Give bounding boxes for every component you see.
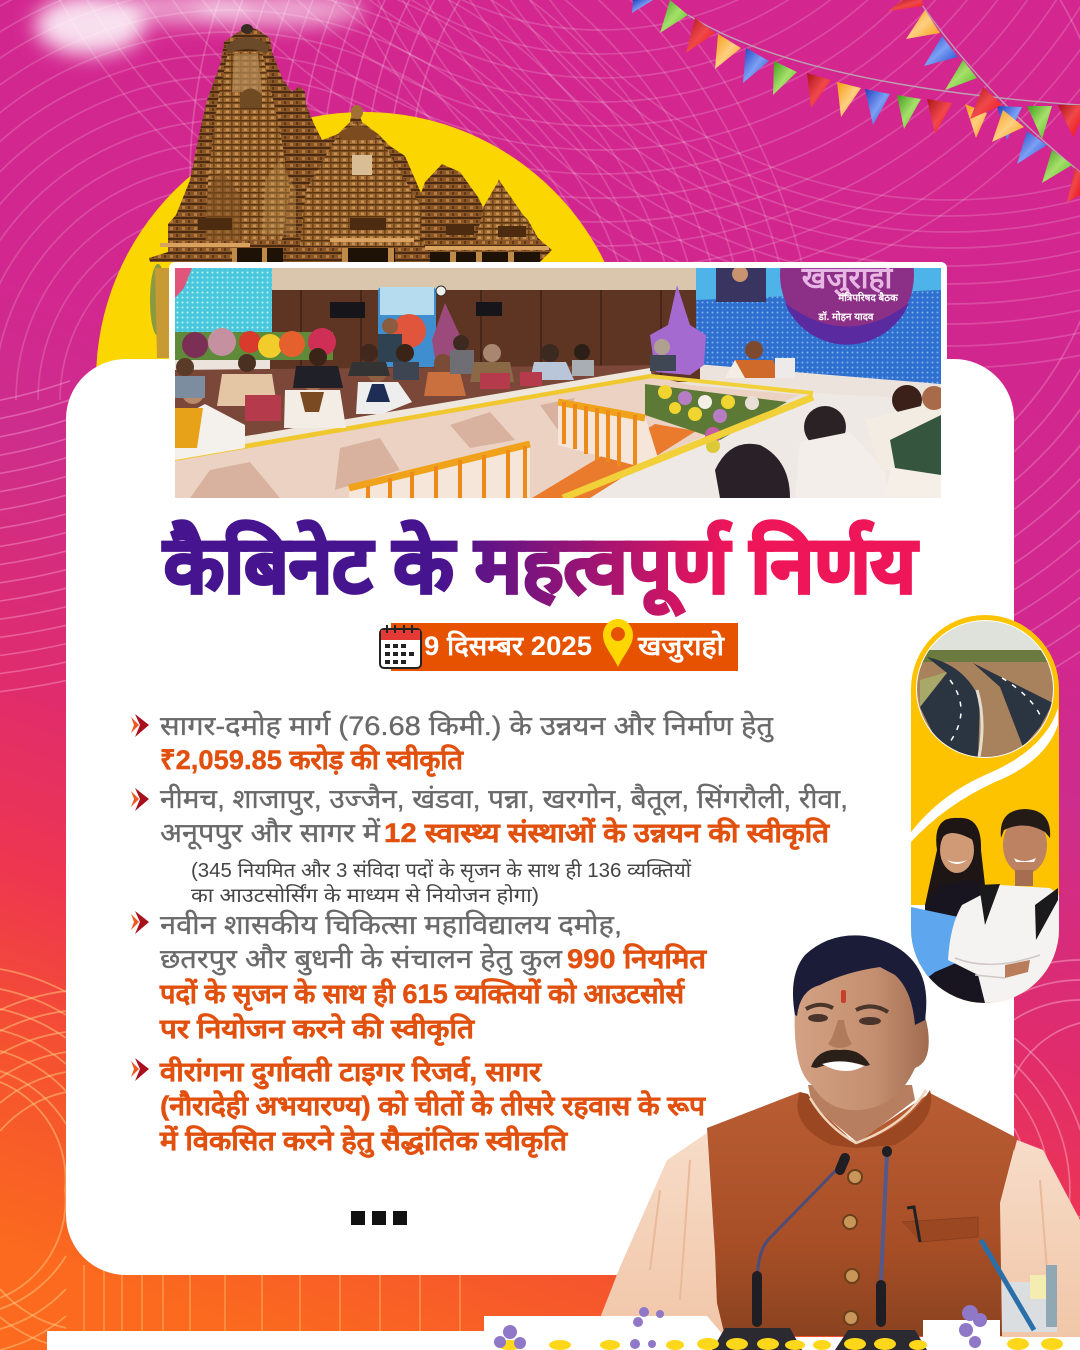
road photo: [915, 620, 1055, 762]
bullet arrow: [131, 788, 149, 811]
decision 3 highlight: पदों के सृजन के साथ ही 615 व्यक्तियों को आउटसोर्स: [159, 978, 686, 1011]
left screen: [175, 268, 272, 333]
bullet arrow: [131, 1058, 149, 1081]
vest collar: [797, 1090, 931, 1148]
pocket and pen: [902, 1207, 978, 1242]
decision 3 text line 2: छतरपुर और बुधनी के संचालन हेतु कुल: [160, 943, 563, 976]
seated people: [175, 318, 795, 460]
bottom white strip: [47, 1331, 487, 1350]
eyes and brows: [806, 1005, 888, 1025]
cloud: [35, 0, 365, 55]
continuation squares: [351, 1211, 407, 1225]
stage screen: [696, 268, 941, 384]
decision 2: [131, 783, 848, 907]
bunting flags: [632, 0, 1080, 202]
decision 4 text: वीरांगना दुर्गावती टाइगर रिजर्व, सागर: [159, 1056, 542, 1090]
temple: [149, 24, 552, 358]
decision 2 note: [191, 859, 692, 907]
table with pink front: [175, 365, 656, 436]
decision 4 text: [159, 1056, 707, 1158]
decision 2 note: (345 नियमित और 3 संविदा पदों के सृजन के साथ ही 136 व्यक्तियों: [191, 859, 692, 883]
decision 4 text: में विकसित करने हेतु सैद्धांतिक स्वीकृति: [159, 1125, 569, 1158]
decision 2 highlight: 12 स्वास्थ्य संस्थाओं के उन्नयन की स्वीकृति: [384, 817, 831, 850]
decision 1: [131, 710, 774, 777]
table white right: [563, 393, 941, 498]
decision 3 highlight: [159, 943, 708, 1046]
location: खजुराहो: [637, 630, 725, 663]
decision 4 text: (नौरादेही अभयारण्य) को चीतों के तीसरे रहवास के रूप: [160, 1090, 707, 1121]
stage screen text: खजुराहो: [801, 260, 893, 297]
title: कैबिनेट के महत्वपूर्ण निर्णय: [162, 520, 919, 616]
vest: [707, 1092, 1017, 1336]
meeting photo: [175, 268, 941, 498]
date: 9 दिसम्बर 2025: [424, 630, 592, 661]
face: [795, 965, 929, 1110]
banner: [378, 286, 446, 367]
tilak: [841, 990, 846, 1003]
icon: location pin: [603, 619, 633, 667]
decision 3 highlight: पर नियोजन करने की स्वीकृति: [159, 1013, 476, 1046]
icon: calendar: [380, 625, 421, 668]
jacket buttons: [843, 1170, 862, 1325]
neck: [808, 1085, 915, 1143]
decision 1 text: सागर-दमोह मार्ग (76.68 किमी.) के उन्नयन और निर्माण हेतु: [160, 710, 774, 743]
pencil holder: [981, 1240, 1057, 1332]
stage screen: डॉ. मोहन यादव: [818, 310, 874, 323]
sleeves: [600, 1133, 1080, 1338]
hair: [793, 935, 926, 1025]
decision 3 highlight: 990 नियमित: [567, 943, 708, 974]
meeting photo frame: [169, 262, 947, 502]
temple model: [650, 285, 706, 375]
decision 2 text line 2: अनूपपुर और सागर में: [160, 817, 381, 850]
man student: [948, 809, 1059, 1003]
flower arrangement left: [175, 328, 336, 360]
foreground people: [715, 385, 946, 498]
temple spires: [205, 24, 538, 246]
center flowers: [645, 384, 787, 453]
swoosh: [911, 708, 1058, 842]
chief minister portrait: [600, 935, 1080, 1338]
bullet arrow: [131, 714, 149, 737]
yellow semicircle: [96, 112, 632, 648]
microphones: [757, 1151, 887, 1322]
date and location badge: [380, 619, 738, 671]
decision 4: [131, 1056, 707, 1158]
stage screen: मंत्रिपरिषद बैठक: [837, 291, 899, 304]
bullet arrow: [131, 911, 149, 934]
blue folder: [911, 907, 956, 977]
decision 3 text line 1: नवीन शासकीय चिकित्सा महाविद्यालय दमोह,: [160, 909, 622, 940]
nose: [828, 1020, 852, 1048]
marigold fences: [349, 376, 813, 498]
white content card: [66, 359, 1014, 1275]
side pill with road and students: [911, 615, 1059, 1003]
decision 2 text line 1: नीमच, शाजापुर, उज्जैन, खंडवा, पन्ना, खरगोन, बैतूल, सिंगरौली, रीवा,: [160, 783, 848, 816]
decision 2 note: का आउटसोर्सिंग के माध्यम से नियोजन होगा): [191, 884, 539, 907]
decision 3: [131, 909, 708, 1046]
woman student: [925, 818, 990, 1003]
moustache and smile: [811, 1050, 870, 1071]
decision 1 highlight: ₹2,059.85 करोड़ की स्वीकृति: [160, 744, 465, 777]
table with flowers: [484, 1305, 1080, 1350]
